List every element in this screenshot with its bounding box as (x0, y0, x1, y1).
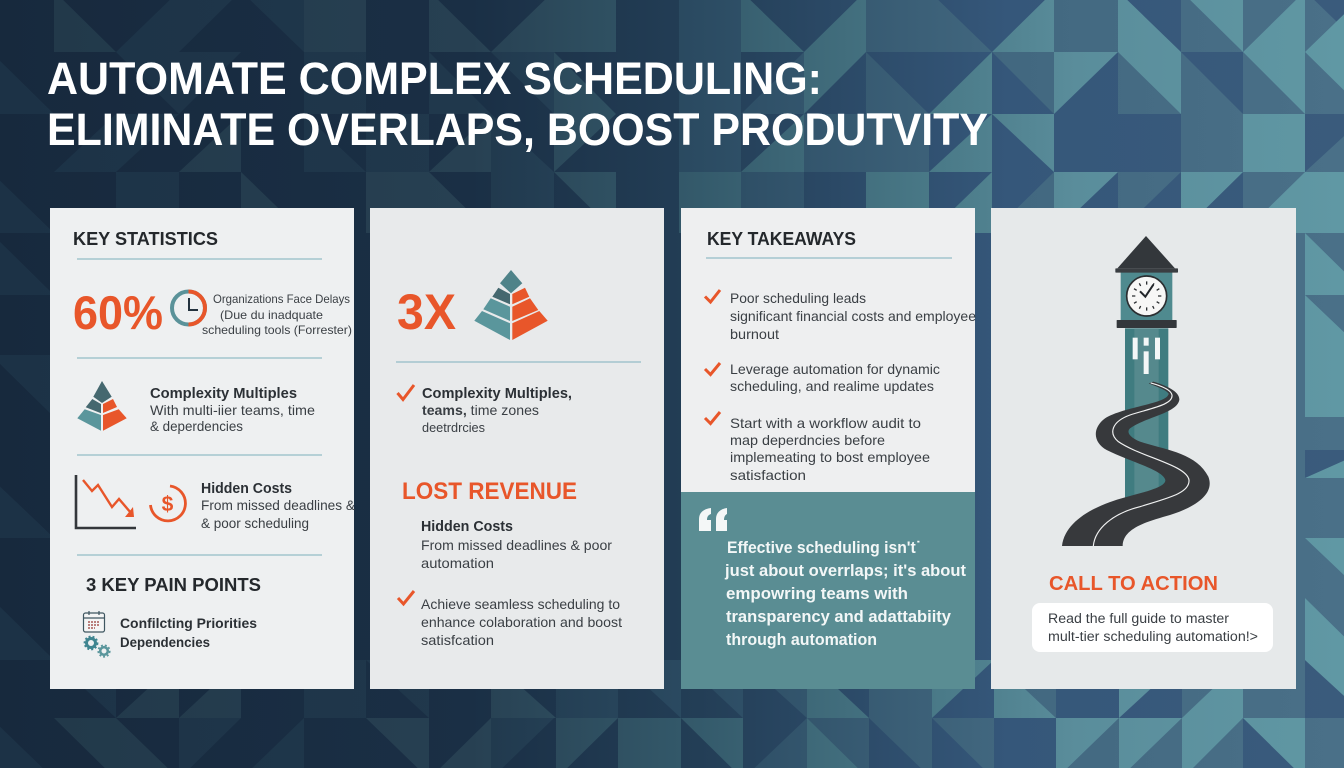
text: complexity multiples: Complexity Multiples (150, 386, 297, 402)
button: read the guide (1032, 603, 1273, 652)
takeaway 1: Poor scheduling leads (730, 290, 866, 306)
panel: 3x complexity and lost revenue (370, 208, 664, 689)
takeaway 2: scheduling, and realime updates (730, 378, 934, 394)
quote text (724, 538, 966, 649)
text: complexity multiples (422, 385, 572, 435)
text: complexity multiples (150, 386, 315, 434)
icon: dollar coin (150, 486, 185, 521)
icon: quote mark (699, 508, 727, 531)
text: pain points list (120, 615, 257, 650)
text: pain points list: Confilcting Priorities (120, 615, 257, 631)
text: hidden costs: From missed deadlines & poor (421, 537, 612, 553)
text: hidden costs: Hidden Costs (421, 519, 513, 535)
icon: calendar (84, 611, 104, 632)
icon: large pyramid (474, 270, 548, 340)
takeaway 3: implemeating to bost employee (730, 449, 930, 465)
icon: gears (84, 636, 110, 657)
takeaway 2 (730, 361, 940, 394)
text: seamless scheduling: enhance colaboration and boost (421, 614, 622, 630)
quote text: just about overrlaps; it's about (724, 561, 966, 580)
icon: check (398, 385, 414, 400)
text: hidden costs (421, 519, 612, 571)
text: seamless scheduling (421, 596, 622, 648)
text: pain points list: Dependencies (120, 634, 210, 650)
quote text: transparency and adattabiity (726, 607, 952, 626)
stat description: Organizations Face Delays (213, 292, 350, 306)
title: ELIMINATE OVERLAPS, BOOST PRODUTVITY (47, 104, 988, 155)
text: hidden costs: automation (421, 555, 494, 571)
icon: check (705, 290, 720, 302)
panel: quote (681, 492, 975, 689)
icon: dollar coin: $ (162, 493, 174, 516)
text: seamless scheduling: Achieve seamless scheduling to (421, 596, 620, 612)
text: hidden costs: Hidden Costs (201, 481, 292, 497)
button: read the guide: Read the full guide to master (1048, 611, 1230, 626)
takeaway 2: Leverage automation for dynamic (730, 361, 940, 377)
icon: check (398, 591, 414, 604)
heading: lost revenue: LOST REVENUE (402, 478, 577, 505)
text: complexity multiples: deetrdrcies (422, 421, 485, 435)
takeaway 1: burnout (730, 326, 779, 342)
panel: key statistics (50, 208, 356, 689)
takeaway 1 (730, 290, 976, 342)
button: read the guide: mult-tier scheduling automation!> (1048, 629, 1258, 644)
text: hidden costs (201, 481, 356, 531)
stat: 3X: 3X (397, 284, 456, 340)
icon: falling cost chart (76, 475, 136, 528)
stat: 60%: 60% (73, 286, 163, 339)
text: seamless scheduling: satisfcation (421, 632, 494, 648)
text: hidden costs: From missed deadlines & (201, 497, 356, 513)
quote text: empowring teams with (726, 584, 908, 603)
icon: clock (172, 292, 205, 324)
text: hidden costs: & poor scheduling (201, 515, 309, 531)
title: AUTOMATE COMPLEX SCHEDULING: (47, 53, 822, 104)
heading: 3 key pain points: 3 KEY PAIN POINTS (86, 575, 261, 595)
panel: key takeaways (681, 208, 976, 493)
stat description: (Due du inadquate (220, 308, 323, 322)
icon: check (705, 412, 720, 424)
heading: call to action: CALL TO ACTION (1049, 573, 1218, 595)
text: complexity multiples: With multi-iier teams, time (150, 402, 315, 418)
text: complexity multiples: & deperdencies (150, 418, 243, 434)
quote text: Effective scheduling isn't˙ (727, 538, 921, 557)
stat description (202, 292, 352, 337)
title (47, 53, 988, 155)
text: complexity multiples: Complexity Multiples, (422, 385, 572, 402)
takeaway 3 (730, 415, 930, 483)
takeaway 3: map deperdncies before (730, 432, 885, 448)
panel: call to action (991, 208, 1296, 689)
takeaway 1: significant financial costs and employee (730, 308, 976, 324)
takeaway 3: satisfaction (730, 467, 806, 483)
illustration: clock tower and winding road (1062, 236, 1210, 546)
takeaway 3: Start with a workflow audit to (730, 415, 921, 431)
icon: pyramid (77, 381, 127, 431)
quote text: through automation (726, 630, 877, 649)
heading: key takeaways: KEY TAKEAWAYS (707, 229, 856, 249)
text: complexity multiples: teams, time zones (422, 402, 539, 418)
icon: check (705, 363, 720, 374)
stat description: scheduling tools (Forrester) (202, 323, 352, 337)
heading: key statistics: KEY STATISTICS (73, 229, 218, 249)
